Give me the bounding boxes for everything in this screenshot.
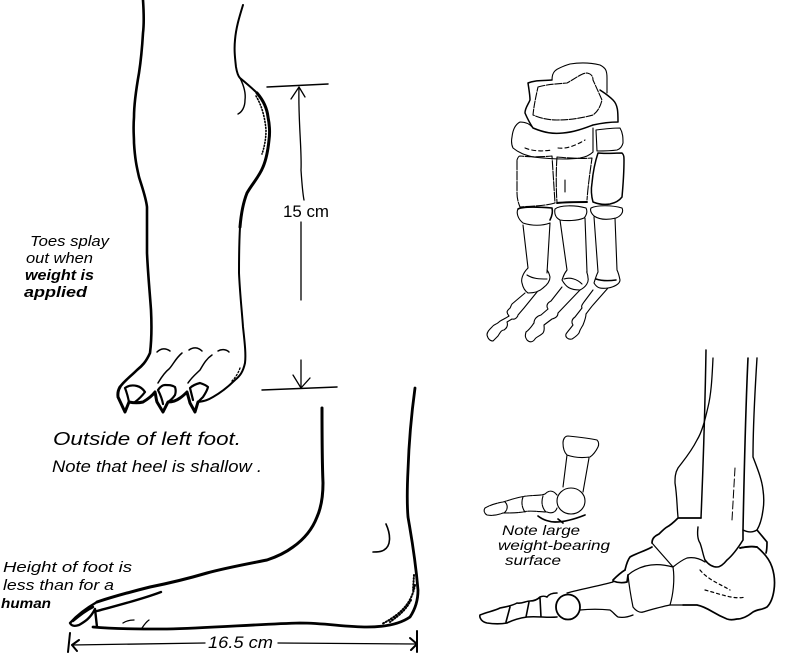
note: height of foot [1, 559, 133, 611]
dimension: 16.5 cm [68, 631, 417, 652]
top of foot outline [97, 408, 323, 602]
note: weight-bearing surface: surface [505, 552, 561, 568]
note: toes splay: applied [24, 284, 88, 301]
ankle bones [512, 63, 623, 159]
metatarsal [567, 582, 633, 617]
side view of foot [70, 388, 418, 629]
toe phalanges [480, 593, 557, 624]
right edge of leg with heel [235, 5, 257, 93]
toe and claw [70, 592, 161, 627]
label: 16.5 cm: 16.5 cm [208, 633, 273, 652]
toes and claws [118, 348, 240, 412]
weight-bearing brace [538, 515, 585, 523]
heel shading [382, 575, 415, 624]
note: toes splay: weight is [25, 267, 94, 284]
leg bones [675, 350, 764, 567]
note: height of foot: less than for a [3, 577, 114, 594]
note: toes splay: out when [26, 250, 93, 267]
label: 15 cm: 15 cm [283, 202, 329, 221]
ankle and heel bones [652, 518, 775, 620]
caption: outside of left foot: Outside of left foot. [53, 429, 241, 449]
skeleton: foot from above [487, 63, 624, 342]
note: toes splay [24, 233, 111, 301]
note: height of foot: Height of foot is [3, 559, 133, 576]
toe phalanges [484, 491, 557, 515]
left edge of leg [120, 0, 151, 387]
metatarsal head [557, 488, 585, 514]
front view of foot [118, 0, 270, 412]
toe phalanges [487, 287, 608, 342]
note: height of foot: human [1, 595, 51, 611]
dimension: 15 cm [262, 84, 337, 390]
note: weight-bearing surface: Note large [502, 522, 580, 538]
metatarsal shafts [517, 206, 623, 293]
back of leg and heel outline [93, 388, 418, 629]
inner heel curve [238, 78, 245, 114]
note: weight-bearing surface: weight-bearing [498, 537, 610, 553]
midfoot bones [613, 547, 673, 612]
metatarsal bone [563, 436, 599, 492]
caption: outside of left foot: Note that heel is shallow . [52, 457, 262, 476]
note: toes splay: Toes splay [30, 233, 111, 250]
skeleton: ankle side view [480, 350, 775, 624]
skeleton: single toe inset [484, 436, 610, 568]
note: weight-bearing surface [498, 522, 610, 568]
metatarsal head [556, 594, 580, 620]
ankle bone curve [373, 524, 390, 552]
heel shading [256, 96, 266, 154]
metatarsal blocks [517, 153, 624, 207]
caption: outside of left foot [52, 429, 262, 476]
